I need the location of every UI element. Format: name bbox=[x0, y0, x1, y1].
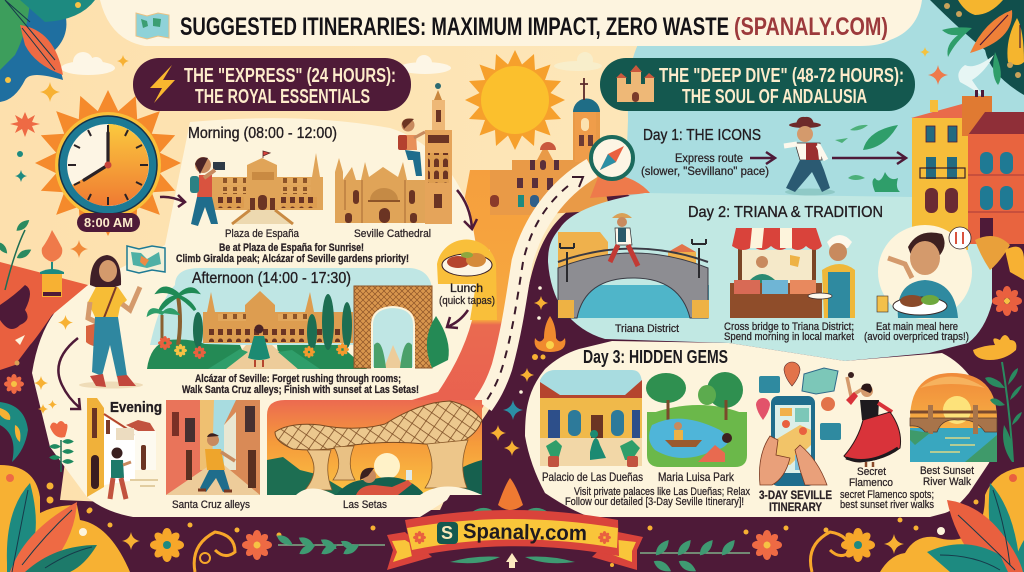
palace bbox=[203, 291, 353, 343]
panel: Day 2 bbox=[548, 193, 992, 361]
heading pill: Deep Dive: THE SOUL OF ANDALUSIA bbox=[682, 86, 867, 108]
heading text: (SPANALY.COM) bbox=[734, 13, 888, 41]
lunch label: (quick tapas) bbox=[439, 295, 495, 307]
corner foliage: top right bbox=[920, 0, 1024, 98]
captions: day 3: Visit private palaces like Las Dueñas; Relax bbox=[574, 486, 750, 498]
captions: day 2: Cross bridge to Triana District; bbox=[724, 321, 854, 333]
captions: day 2: (avoid overpriced traps!) bbox=[864, 331, 969, 343]
captions: day 3: Secret bbox=[857, 466, 886, 478]
captions: day 3: River Walk bbox=[923, 476, 971, 488]
captions: afternoon bbox=[182, 373, 419, 396]
foliage by arch bbox=[427, 316, 449, 368]
afternoon heading: Afternoon (14:00 - 17:30) bbox=[192, 270, 351, 287]
captions: afternoon: Walk Santa Cruz alleys; Finish with sunset at Las Setas! bbox=[182, 384, 419, 396]
captions: morning: Climb Giralda peak; Alcázar of Seville gardens priority! bbox=[176, 253, 409, 265]
decorative stars left bbox=[10, 55, 129, 414]
captions: morning: Seville Cathedral bbox=[354, 228, 431, 240]
illustration: Seville Cathedral and Giralda bbox=[335, 83, 452, 224]
arrow: clock to plaza bbox=[160, 195, 185, 207]
heading pill: Express bbox=[133, 58, 411, 111]
day 1 text: Express route bbox=[675, 151, 743, 165]
morning heading: Morning (08:00 - 12:00) bbox=[188, 125, 337, 142]
illustration: Alcázar gardens bbox=[147, 286, 449, 369]
sprig bottom left bbox=[275, 533, 385, 557]
arrows: day 1 bbox=[750, 152, 906, 164]
icon: compass bbox=[591, 137, 633, 179]
illustration: market stall bbox=[730, 228, 855, 318]
day 1 text: Day 1: THE ICONS bbox=[643, 127, 761, 144]
heading text: SUGGESTED ITINERARIES: MAXIMUM IMPACT, ZERO WASTE bbox=[180, 13, 729, 41]
icon: world map bbox=[136, 13, 169, 39]
street lamps bbox=[560, 239, 706, 282]
left frame ornaments bbox=[0, 217, 88, 462]
photographer bbox=[190, 157, 225, 226]
icon: sun bbox=[465, 50, 565, 150]
plum decorative frame bbox=[0, 193, 1024, 572]
bottom-right foliage bbox=[880, 467, 1024, 572]
heading pill: Express: THE "EXPRESS" (24 HOURS): bbox=[184, 65, 396, 87]
illustration: phone with itinerary bbox=[756, 362, 841, 486]
heading: Evening: Evening bbox=[110, 399, 162, 416]
lunch label bbox=[439, 281, 495, 307]
person walking bbox=[110, 448, 131, 499]
illustration: Santa Cruz alleys bbox=[166, 400, 260, 495]
day 2 heading: Day 2: TRIANA & TRADITION bbox=[688, 204, 883, 221]
panel: Day 3 bbox=[525, 341, 995, 517]
woman in green dress bbox=[248, 324, 270, 367]
leaves: day 1 bbox=[835, 125, 900, 192]
icon: lunch plate bbox=[437, 239, 497, 320]
captions: evening bbox=[172, 499, 387, 511]
heading pill: Deep Dive bbox=[600, 58, 915, 111]
icon: map held by traveller bbox=[127, 246, 165, 273]
banner: Spanaly.com: Spanaly.com bbox=[463, 520, 587, 545]
illustration: Las Setas bbox=[267, 400, 482, 495]
floating pins and cards bbox=[756, 362, 841, 440]
illustration: woman traveller bbox=[79, 255, 143, 388]
heading pill: Express: THE ROYAL ESSENTIALS bbox=[195, 86, 370, 108]
title bar bbox=[100, 0, 922, 46]
flowers bbox=[158, 336, 349, 359]
captions: day 3: Palacio de Las Dueñas bbox=[542, 470, 643, 484]
icon: church and old town bbox=[490, 78, 650, 215]
selfie person bbox=[356, 468, 412, 495]
heading pill: Deep Dive: THE "DEEP DIVE" (48-72 HOURS): bbox=[659, 65, 904, 87]
icon: garden lamp bbox=[40, 230, 64, 297]
captions: evening: Santa Cruz alleys bbox=[172, 499, 250, 511]
captions: day 3: Best Sunset bbox=[920, 465, 974, 477]
illustration: walker in hat bbox=[784, 117, 835, 196]
central frame ornaments bbox=[450, 286, 575, 568]
captions: day 3: secret Flamenco spots; bbox=[840, 489, 934, 501]
right frame ornaments bbox=[973, 236, 1024, 462]
day 1 text bbox=[641, 127, 769, 178]
captions: day 3: ITINERARY bbox=[769, 500, 822, 514]
illustration: Triana bridge bbox=[558, 213, 709, 318]
corner foliage: top left bbox=[0, 0, 95, 102]
icon: clock with sun rays, 8:00 AM: 8:00 AM bbox=[84, 215, 133, 230]
sprig bottom right bbox=[640, 537, 750, 572]
climber bbox=[398, 118, 425, 176]
illustration: diner bbox=[877, 225, 972, 319]
icon: S logo: S bbox=[441, 523, 453, 543]
leaf sprig upper left bbox=[0, 217, 33, 290]
palm trees bbox=[148, 288, 197, 345]
arrow: lunch to afternoon bbox=[447, 310, 468, 328]
icon: S logo bbox=[437, 522, 458, 544]
decorative sprig: left panel bbox=[49, 421, 74, 472]
arrow: afternoon to evening bbox=[58, 338, 80, 409]
plum frame dots bbox=[88, 508, 902, 567]
captions: morning: Plaza de España bbox=[225, 228, 300, 240]
captions: day 3: best sunset river walks bbox=[840, 499, 934, 511]
illustration: flamenco dancer bbox=[844, 372, 901, 467]
icon: clock with sun rays, 8:00 AM bbox=[35, 90, 181, 236]
sunset band beside the morning panel bbox=[340, 170, 590, 412]
bottom-left foliage bbox=[0, 465, 130, 572]
dashed route road bbox=[483, 168, 592, 405]
captions: day 3: 3-DAY SEVILLE bbox=[759, 488, 832, 502]
day 3 heading: Day 3: HIDDEN GEMS bbox=[583, 347, 728, 367]
icon: castle bbox=[616, 65, 655, 102]
left itinerary panel bbox=[32, 118, 490, 517]
man walking bbox=[198, 433, 235, 492]
illustration: photographer at Plaza de España bbox=[190, 151, 323, 226]
captions: evening: Las Setas bbox=[343, 499, 387, 511]
canopy bbox=[275, 401, 482, 450]
captions: morning: Be at Plaza de España for Sunrise! bbox=[219, 242, 364, 254]
captions: day 2: Spend morning in local market bbox=[724, 331, 854, 343]
captions: afternoon: Alcázar of Seville: Forget rushing through rooms; bbox=[195, 373, 401, 385]
cypresses bbox=[193, 294, 352, 350]
afternoon sky backdrop bbox=[150, 268, 432, 345]
illustration: Maria Luisa Park bbox=[646, 372, 747, 467]
captions: day 3: Maria Luisa Park bbox=[658, 470, 735, 484]
illustration: sunset river walk bbox=[910, 373, 997, 462]
fleur below banner bbox=[506, 553, 518, 568]
captions: day 2 bbox=[615, 321, 969, 343]
arrow: morning to lunch bbox=[457, 190, 477, 229]
banner: Spanaly.com bbox=[387, 510, 643, 570]
captions: day 3: Follow our detailed [3-Day Seville Itinerary]! bbox=[565, 496, 744, 508]
bottom decorations: flowers and sprigs bbox=[88, 508, 904, 572]
captions: day 3: Flamenco bbox=[849, 477, 893, 489]
man on bridge bbox=[610, 213, 638, 266]
Giralda tower bbox=[425, 83, 452, 224]
clouds bbox=[61, 52, 602, 75]
cityscape and sun behind road bbox=[61, 50, 650, 215]
flower ornament above banner bbox=[498, 478, 523, 510]
day 1 text: (slower, "Sevillano" pace) bbox=[641, 164, 769, 178]
icon: lightning bolt bbox=[150, 65, 175, 103]
illustration: Palacio de Las Dueñas bbox=[540, 370, 642, 467]
captions: day 2: Eat main meal here bbox=[876, 321, 958, 333]
illustration: evening street bbox=[87, 398, 158, 499]
illustration: colourful buildings bbox=[911, 90, 1024, 250]
garden bbox=[147, 340, 367, 369]
plaza building bbox=[212, 151, 323, 224]
lunch label: Lunch bbox=[450, 281, 483, 295]
Moorish arch bbox=[354, 286, 432, 368]
captions: day 3 bbox=[542, 465, 974, 514]
vendor bbox=[808, 235, 855, 318]
captions: morning bbox=[176, 228, 431, 265]
captions: day 2: Triana District bbox=[615, 323, 679, 335]
wind swirl bbox=[958, 55, 994, 98]
